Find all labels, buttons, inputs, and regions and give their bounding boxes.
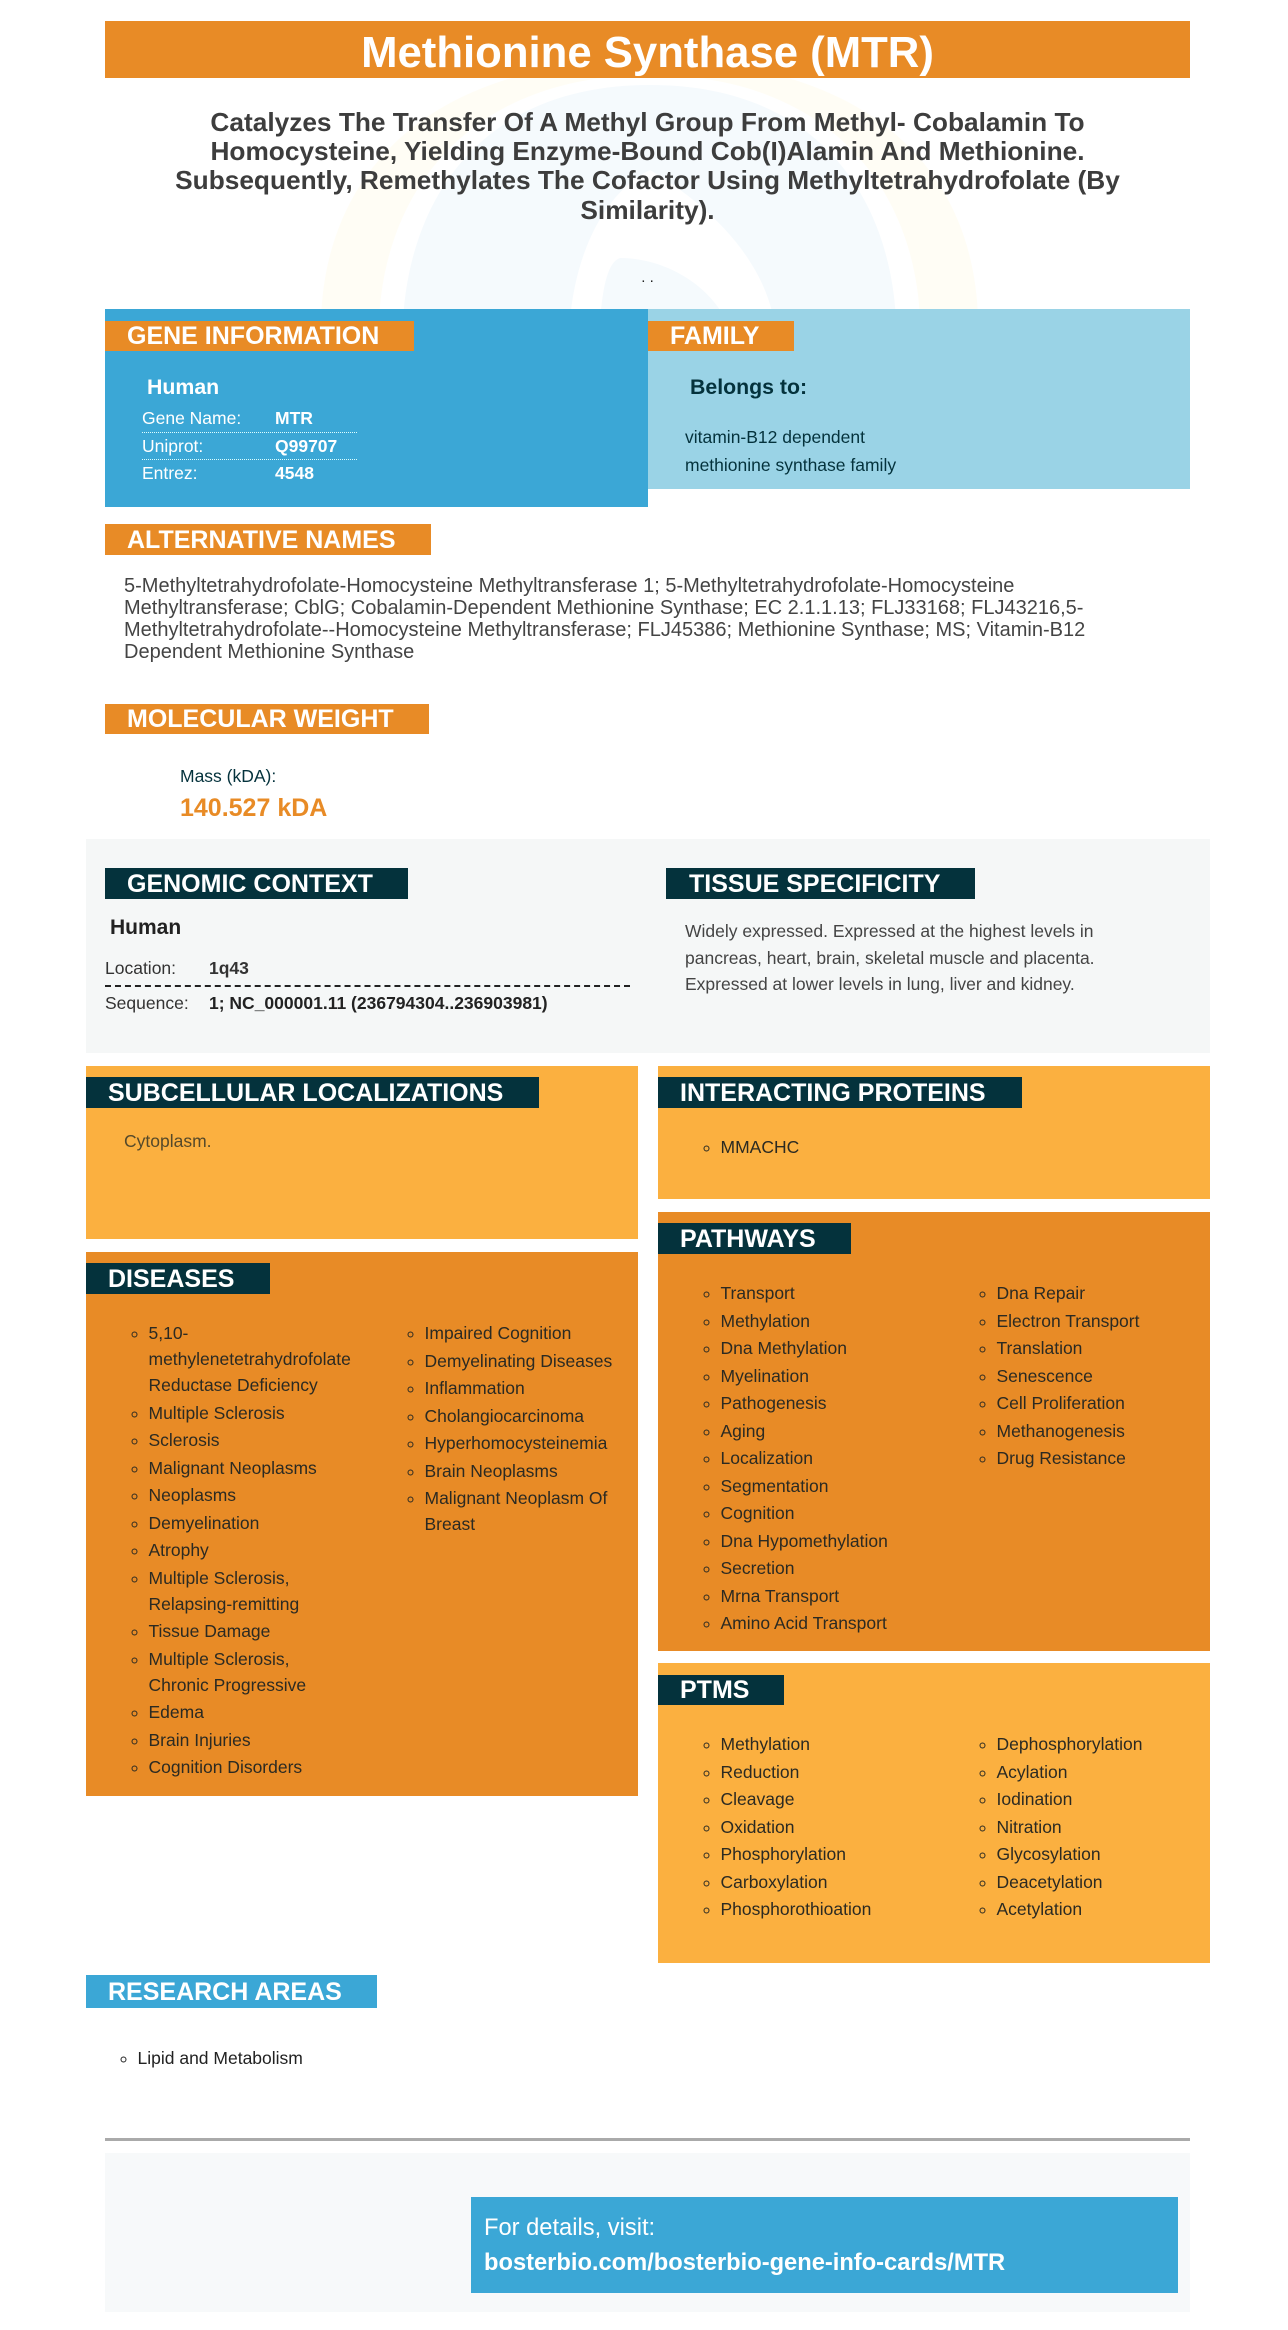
heading: genomic context: GENOMIC CONTEXT (127, 870, 373, 898)
pathway list column 1: Methylation (720, 1310, 810, 1330)
pathway list column 1: Myelination (720, 1366, 809, 1386)
location row (105, 955, 630, 987)
sequence row (105, 993, 548, 1013)
pathway list column 1 (704, 1283, 888, 1633)
uniprot row: Uniprot: (142, 436, 203, 456)
disease list column 1: 5,10- (148, 1323, 188, 1343)
disease list column 1: Brain Injuries (148, 1730, 251, 1750)
details url: bosterbio.com/bosterbio-gene-info-cards/MTR (484, 2250, 1005, 2276)
disease list column 1: Demyelination (148, 1512, 259, 1532)
disease list column 2: Impaired Cognition (424, 1323, 571, 1343)
disease list column 2: Demyelinating Diseases (424, 1350, 612, 1370)
ptm list column 1: Phosphorylation (720, 1844, 846, 1864)
callout: details link (471, 2197, 1178, 2293)
uniprot row (142, 433, 357, 460)
disease list column 2: Brain Neoplasms (424, 1460, 558, 1480)
pathway list column 2: Drug Resistance (996, 1448, 1126, 1468)
disease list column 1: Tissue Damage (148, 1621, 270, 1641)
heading: research areas: RESEARCH AREAS (108, 1978, 342, 2006)
description: Subsequently, Remethylates The Cofactor Using Methyltetrahydrofolate (By (175, 165, 1120, 195)
heading: diseases (86, 1263, 270, 1294)
panel: subcellular localizations (86, 1066, 638, 1239)
panel: family (648, 309, 1190, 489)
ptm list column 2 (980, 1734, 1142, 1919)
disease list column 1: Multiple Sclerosis (148, 1402, 285, 1422)
heading: interacting proteins: INTERACTING PROTEINS (680, 1079, 986, 1107)
pathway list column 1: Cognition (720, 1503, 794, 1523)
pathway list column 2: Translation (996, 1338, 1082, 1358)
separator dots: . . (641, 269, 654, 286)
entrez row (142, 463, 314, 483)
ptm list column 1: Methylation (720, 1734, 810, 1754)
heading: pathways: PATHWAYS (680, 1225, 816, 1253)
pathway list column 2: Cell Proliferation (996, 1393, 1125, 1413)
pathway list column 2: Methanogenesis (996, 1420, 1125, 1440)
tissue specificity text: pancreas, heart, brain, skeletal muscle and placenta. (685, 948, 1095, 968)
ptm list column 1: Oxidation (720, 1816, 794, 1836)
gene name row: Gene Name: (142, 408, 241, 428)
pathway list column 1: Secretion (720, 1558, 794, 1578)
ptm list column 1: Reduction (720, 1762, 799, 1782)
pathway list column 2: Electron Transport (996, 1310, 1139, 1330)
ptm list column 2: Nitration (996, 1816, 1062, 1836)
heading: subcellular localizations: SUBCELLULAR LOCALIZATIONS (108, 1079, 503, 1107)
pathway list column 2: Dna Repair (996, 1283, 1085, 1303)
localization text: Cytoplasm. (124, 1131, 212, 1151)
pathway list column 2: Senescence (996, 1366, 1093, 1386)
pathway list column 1: Dna Methylation (720, 1338, 847, 1358)
heading: ptms (658, 1675, 784, 1705)
tissue specificity text: Widely expressed. Expressed at the highest levels in (685, 921, 1094, 941)
family text (685, 427, 896, 475)
description: Homocysteine, Yielding Enzyme-Bound Cob(I)Alamin And Methionine. (210, 136, 1085, 166)
family text: methionine synthase family (685, 455, 896, 475)
tissue specificity text (685, 921, 1095, 994)
title: Methionine Synthase (MTR) (361, 28, 934, 77)
ptm list column 2: Glycosylation (996, 1844, 1101, 1864)
panel: interacting proteins (658, 1066, 1210, 1199)
alternative names text: Methyltransferase; CblG; Cobalamin-Dependent Methionine Synthase; EC 2.1.1.13; FLJ33168; FLJ43216,5- (124, 597, 1083, 619)
disease list column 1: Multiple Sclerosis, (148, 1648, 290, 1668)
ptm list column 1: Phosphorothioation (720, 1899, 871, 1919)
disease list column 1: Reductase Deficiency (148, 1375, 318, 1395)
belongs to: Belongs to: (690, 375, 807, 399)
disease list column 1 (132, 1323, 351, 1777)
heading: diseases: DISEASES (108, 1265, 234, 1293)
pathway list column 1: Transport (720, 1283, 795, 1303)
entrez row: Entrez: (142, 463, 197, 483)
pathway list column 1: Pathogenesis (720, 1393, 827, 1413)
ptm list column 2: Acylation (996, 1762, 1068, 1782)
uniprot row: Q99707 (275, 436, 337, 456)
background watermark (322, 78, 978, 309)
panel: footer (105, 2153, 1190, 2312)
panel: genomic context and tissue specificity: 1; NC_000001.11 (236794304..236903981) (209, 993, 548, 1013)
location row: Location: (105, 958, 176, 978)
mass value: 140.527 kDA (180, 794, 327, 822)
description: Similarity). (580, 195, 715, 225)
sequence row: Sequence: (105, 993, 189, 1013)
pathway list column 1: Localization (720, 1448, 813, 1468)
pathway list column 1: Aging (720, 1420, 765, 1440)
pathway list column 1: Mrna Transport (720, 1586, 839, 1606)
research areas list: Lipid and Metabolism (138, 2048, 303, 2068)
species: Human (110, 916, 181, 939)
ptm list column 2: Acetylation (996, 1899, 1082, 1919)
heading: gene information: GENE INFORMATION (127, 322, 379, 350)
ptm list column 2: Dephosphorylation (996, 1734, 1142, 1754)
disease list column 1: Neoplasms (148, 1485, 236, 1505)
pathway list column 1: Amino Acid Transport (720, 1613, 887, 1633)
entrez row: 4548 (275, 463, 314, 483)
heading: molecular weight: MOLECULAR WEIGHT (127, 705, 394, 733)
disease list column 1: Relapsing-remitting (148, 1594, 299, 1614)
disease list column 2: Inflammation (424, 1378, 525, 1398)
panel: genomic context and tissue specificity (86, 839, 1210, 1053)
panel: pathways (658, 1212, 1210, 1651)
tissue specificity text: Expressed at lower levels in lung, liver and kidney. (685, 974, 1075, 994)
disease list column 2: Malignant Neoplasm Of (424, 1488, 607, 1508)
panel: diseases (86, 1252, 638, 1796)
title (105, 21, 1190, 78)
pathway list column 2 (980, 1283, 1140, 1468)
disease list column 1: Chronic Progressive (148, 1674, 306, 1694)
heading: ptms: PTMS (680, 1676, 749, 1704)
species: Human (147, 375, 219, 399)
disease list column 2 (408, 1323, 612, 1534)
alternative names text (124, 575, 1085, 663)
divider (105, 2138, 1190, 2141)
pathway list column 1: Segmentation (720, 1476, 828, 1496)
heading: family (648, 321, 794, 351)
heading: pathways (658, 1223, 851, 1254)
disease list column 2: Hyperhomocysteinemia (424, 1433, 607, 1453)
details label: For details, visit: (484, 2215, 655, 2241)
ptm list column 2: Deacetylation (996, 1872, 1103, 1892)
description (175, 107, 1120, 225)
ptm list column 1: Cleavage (720, 1789, 794, 1809)
disease list column 2: Cholangiocarcinoma (424, 1406, 584, 1426)
description: Catalyzes The Transfer Of A Methyl Group From Methyl- Cobalamin To (210, 107, 1085, 137)
panel: ptms (658, 1663, 1210, 1963)
mass label: Mass (kDA): (180, 766, 276, 786)
alternative names text: Dependent Methionine Synthase (124, 641, 414, 663)
location row: 1q43 (209, 958, 249, 978)
interactor list: MMACHC (720, 1137, 799, 1157)
disease list column 1: Edema (148, 1702, 204, 1722)
disease list column 1: methylenetetrahydrofolate (148, 1349, 351, 1369)
disease list column 1: Multiple Sclerosis, (148, 1568, 290, 1588)
heading: family: FAMILY (670, 322, 759, 350)
ptm list column 2: Iodination (996, 1789, 1072, 1809)
panel: gene information (105, 309, 648, 507)
disease list column 1: Atrophy (148, 1540, 209, 1560)
ptm list column 1: Carboxylation (720, 1872, 828, 1892)
disease list column 1: Malignant Neoplasms (148, 1458, 317, 1478)
disease list column 1: Sclerosis (148, 1430, 220, 1450)
heading: tissue specificity: TISSUE SPECIFICITY (689, 870, 940, 898)
heading: alternative names: ALTERNATIVE NAMES (127, 526, 396, 554)
gene name row (142, 405, 357, 433)
disease list column 2: Breast (424, 1514, 475, 1534)
family text: vitamin-B12 dependent (685, 427, 865, 447)
disease list column 1: Cognition Disorders (148, 1757, 302, 1777)
gene name row: MTR (275, 408, 313, 428)
pathway list column 1: Dna Hypomethylation (720, 1530, 888, 1550)
alternative names text: 5-Methyltetrahydrofolate-Homocysteine Methyltransferase 1; 5-Methyltetrahydrofolate-Homocysteine (124, 575, 1014, 597)
alternative names text: Methyltetrahydrofolate--Homocysteine Methyltransferase; FLJ45386; Methionine Synthase; MS; Vitamin-B12 (124, 619, 1085, 641)
heading: research areas (86, 1975, 377, 2008)
ptm list column 1 (704, 1734, 871, 1919)
